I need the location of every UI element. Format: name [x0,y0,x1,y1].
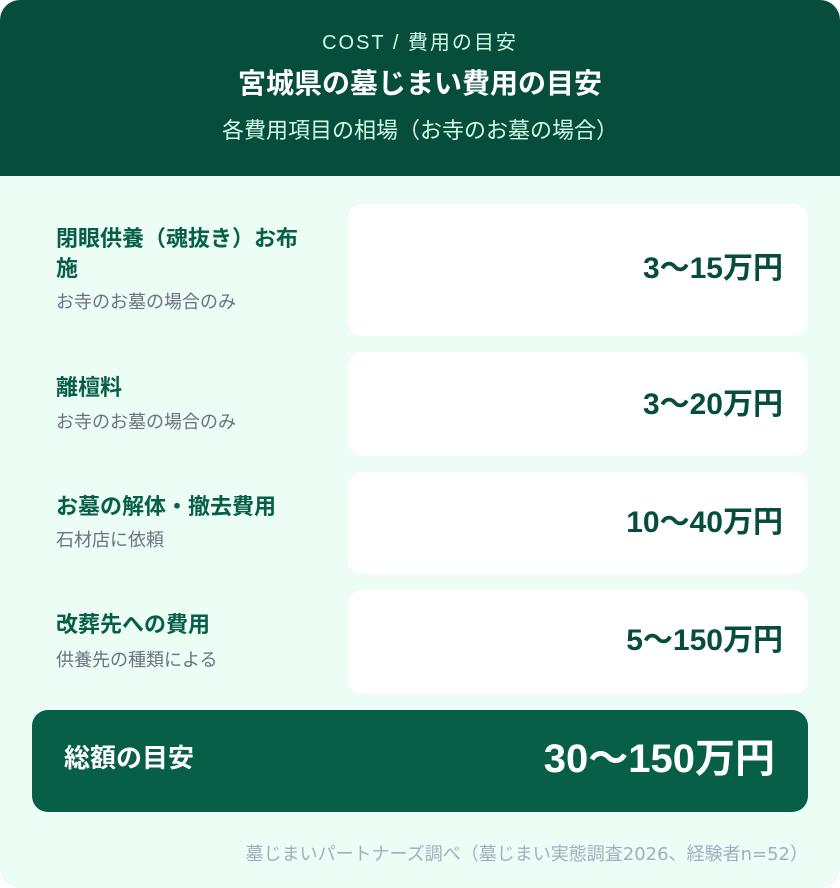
row card: 解体 [348,472,808,574]
row value: 解体: 10〜40万円 [626,506,783,539]
row label: 離檀料: 離檀料 [56,375,122,400]
row value: 閉眼供養: 3〜15万円 [643,252,783,285]
row note: 離檀料: お寺のお墓の場合のみ [56,412,236,432]
total band [32,710,808,812]
row note: 閉眼供養: お寺のお墓の場合のみ [56,292,236,312]
row label: 解体: お墓の解体・撤去費用 [56,494,276,519]
row card: 改葬先 [348,590,808,694]
total value: 30〜150万円 [544,737,775,781]
row label: 閉眼供養: 閉眼供養（魂抜き）お布施 [56,226,298,281]
row note: 改葬先: 供養先の種類による [56,650,217,670]
header band [0,0,840,176]
row value: 改葬先: 5〜150万円 [626,624,783,657]
row note: 解体: 石材店に依頼 [56,530,164,550]
row value: 離檀料: 3〜20万円 [643,388,783,421]
total label: 総額の目安 [64,743,194,773]
source note: 墓じまいパートナーズ調べ（墓じまい実態調査2026、経験者n=52） [246,844,808,865]
row card: 閉眼供養 [348,204,808,336]
row label: 改葬先: 改葬先への費用 [56,612,210,637]
subtitle: 各費用項目の相場（お寺のお墓の場合） [222,118,618,143]
title: 宮城県の墓じまい費用の目安 [238,68,602,99]
row card: 離檀料 [348,352,808,456]
eyebrow: COST / 費用の目安 [322,32,518,54]
